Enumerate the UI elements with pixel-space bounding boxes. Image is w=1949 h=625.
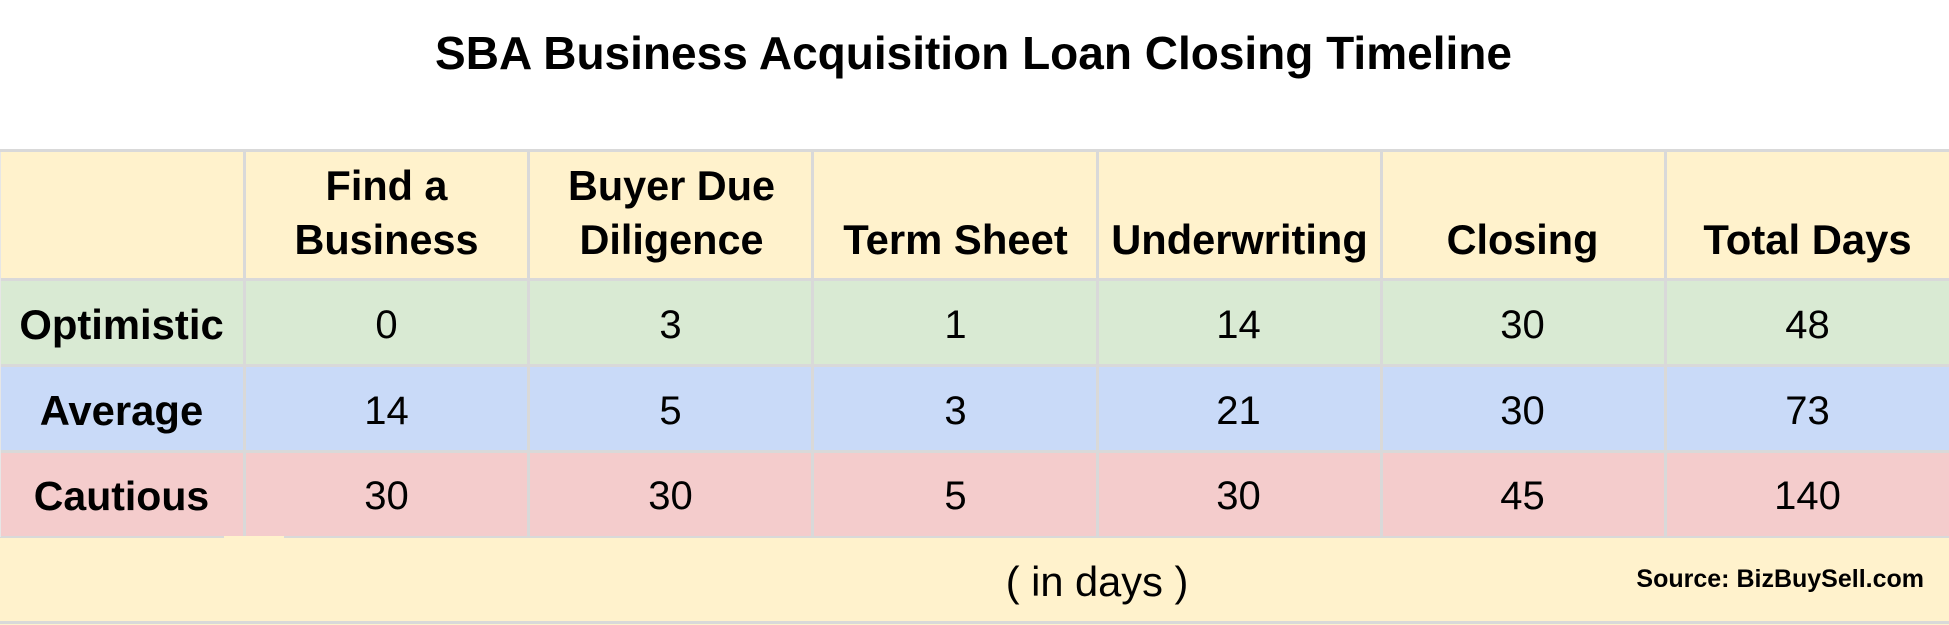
row: Cautious [0, 452, 1949, 538]
value: Term Sheet average: 3 [944, 388, 967, 432]
header: Find a Business [294, 162, 479, 262]
value: Term Sheet optimistic: 1 [944, 302, 967, 346]
value: Buyer Due Diligence average: 5 [659, 388, 682, 432]
row label: Optimistic: Optimistic [19, 300, 224, 348]
header: Term Sheet: Term Sheet [843, 216, 1068, 263]
header: Underwriting: Underwriting [1111, 216, 1368, 263]
value: Closing average: 30 [1500, 388, 1545, 432]
value: Underwriting average: 21 [1216, 388, 1261, 432]
value: Total Days optimistic: 48 [1785, 302, 1830, 346]
header: Closing: Closing [1447, 217, 1598, 263]
value: Total Days cautious: 140 [1774, 474, 1841, 518]
source note: Source: BizBuySell.com [1636, 565, 1924, 593]
table [0, 149, 1949, 625]
value: Term Sheet cautious: 5 [944, 474, 967, 518]
row: Average [0, 366, 1949, 452]
title: SBA Business Acquisition Loan Closing Timeline [435, 27, 1512, 79]
header row [0, 149, 1949, 280]
unit note: ( in days ) [1006, 558, 1188, 605]
value: Buyer Due Diligence cautious: 30 [648, 474, 693, 518]
value: Underwriting cautious: 30 [1216, 474, 1261, 518]
value: Find a Business optimistic: 0 [375, 302, 398, 346]
header: Find a Business: Business [294, 216, 479, 262]
value: Total Days average: 73 [1785, 388, 1830, 432]
header: Total Days: Total Days [1703, 216, 1912, 263]
value: Underwriting optimistic: 14 [1216, 302, 1261, 346]
value: Buyer Due Diligence optimistic: 3 [659, 302, 682, 346]
value: Closing cautious: 45 [1500, 474, 1545, 518]
row label: Average: Average [40, 386, 203, 434]
row label: Cautious: Cautious [34, 472, 209, 518]
row: Optimistic [0, 280, 1949, 366]
header: Buyer Due Diligence: Buyer Due [568, 162, 775, 208]
footer row [0, 538, 1949, 625]
header: Find a Business: Find a [326, 162, 447, 208]
value: Find a Business average: 14 [364, 388, 409, 432]
value: Find a Business cautious: 30 [364, 474, 409, 518]
value: Closing optimistic: 30 [1500, 302, 1545, 346]
header: Buyer Due Diligence [568, 162, 775, 262]
header: Buyer Due Diligence: Diligence [579, 216, 764, 262]
